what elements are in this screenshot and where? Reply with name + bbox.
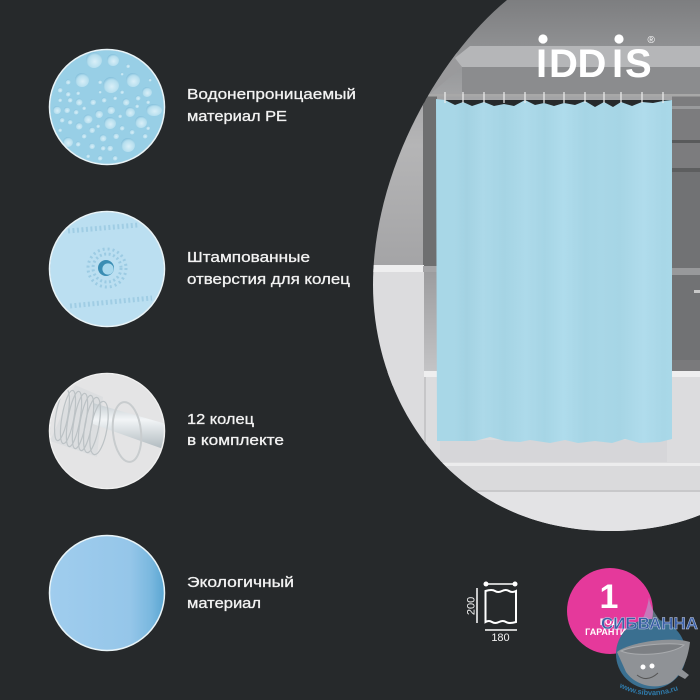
caption: Штампованные — [187, 249, 310, 266]
curtain — [436, 99, 672, 443]
icon: curtain dimensions 200 x 180: 180 — [491, 632, 510, 644]
panel: waterproof material — [48, 48, 356, 166]
badge: 1 year warranty: ГОД — [600, 617, 619, 627]
image: water droplets — [48, 48, 166, 166]
dotted ring — [93, 254, 121, 282]
caption: в комплекте — [187, 432, 284, 449]
panel: eco material — [50, 536, 294, 650]
caption — [187, 574, 294, 612]
curtain hooks — [445, 92, 663, 103]
panel: stamped ring holes — [48, 210, 350, 328]
bath foot — [676, 668, 689, 679]
caption: Водонепроницаемый — [187, 86, 356, 103]
image: plain blue material — [50, 536, 164, 650]
drop — [618, 597, 680, 652]
hole — [98, 260, 114, 276]
caption — [187, 249, 350, 288]
face — [640, 664, 646, 670]
left upper wall — [429, 52, 457, 94]
dotted seam bottom — [70, 298, 152, 306]
cornice — [455, 46, 700, 67]
panel: twelve rings — [48, 372, 284, 490]
caption: материал PE — [187, 108, 287, 125]
caption: отверстия для колец — [187, 271, 350, 288]
image: rings on rod — [48, 372, 166, 490]
photo: bathroom with shower curtain — [370, 0, 700, 537]
caption: 12 колец — [187, 411, 254, 428]
watermark: sibvanna mascot — [601, 598, 698, 696]
bath — [617, 640, 690, 686]
logo: IDDIS: IDDIS — [536, 42, 652, 86]
icon: curtain dimensions 200 x 180 — [466, 582, 518, 644]
icon: curtain dimensions 200 x 180: 200 — [466, 597, 478, 615]
logo: IDDIS: ® — [648, 35, 656, 46]
image: stamped hole — [48, 210, 166, 328]
badge: 1 year warranty: 1 — [600, 578, 618, 616]
watermark: sibvanna mascot: www.sibvanna.ru — [620, 684, 678, 696]
caption: Экологичный — [187, 574, 294, 591]
tiled lower wall — [370, 266, 424, 386]
left side wall — [374, 103, 424, 266]
caption — [187, 86, 356, 125]
caption — [187, 411, 284, 449]
shower niche — [423, 95, 437, 266]
dotted seam top — [68, 225, 138, 231]
caption: материал — [187, 595, 261, 612]
bath side and floor — [370, 372, 700, 537]
upper wall — [426, 0, 700, 100]
curtain rod — [428, 94, 700, 96]
curtain liner — [440, 460, 442, 462]
badge: 1 year warranty — [567, 568, 653, 654]
blue disc — [616, 619, 686, 689]
watermark text: СИБВАННА — [601, 614, 698, 633]
badge: 1 year warranty: ГАРАНТИИ — [585, 627, 633, 637]
